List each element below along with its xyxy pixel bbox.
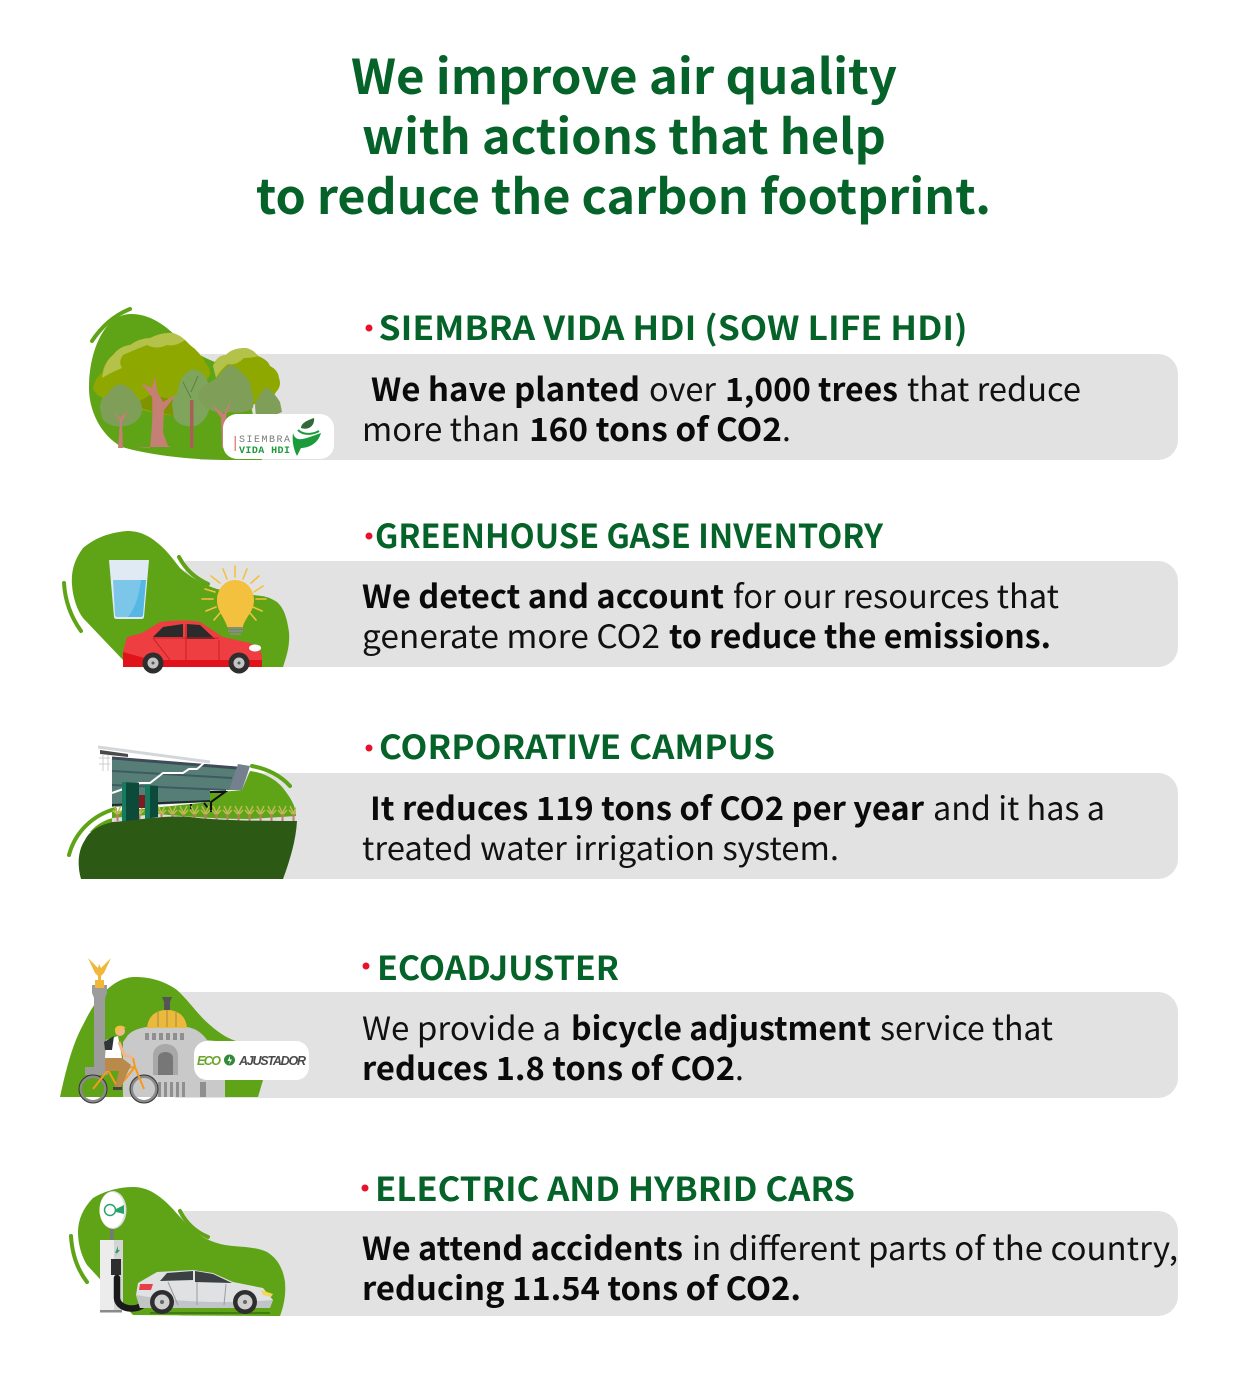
body text 3 [362, 784, 1105, 870]
body text 2: to reduce the emissions. [669, 612, 1051, 658]
grey text card 4 [175, 992, 1178, 1098]
body text 1: We have planted [371, 365, 640, 411]
body text 1 [362, 365, 1081, 451]
logo: Siembra Vida HDI: VIDA HDI [239, 446, 290, 457]
body text 4: We provide a [362, 1004, 561, 1050]
mid tree [172, 370, 211, 426]
dark green lawn [79, 817, 297, 879]
heading: Siembra Vida HDI: SIEMBRA VIDA HDI (SOW LIFE HDI) [378, 302, 968, 350]
body text 3: treated water irrigation system. [362, 824, 839, 870]
panel: Greenhouse gas inventory [64, 510, 1178, 674]
title [256, 38, 991, 228]
logo: Eco Ajustador [194, 1041, 309, 1080]
icon: campus building on green hill [69, 747, 297, 879]
panel: Siembra Vida HDI [89, 302, 1178, 460]
hedge [112, 814, 296, 822]
body text 4: . [735, 1044, 744, 1090]
grey text card 2 [185, 561, 1178, 667]
body text 5: We attend accidents [362, 1224, 683, 1270]
icon: green blob with trees [89, 309, 334, 460]
heading: Ecoadjuster: ECOADJUSTER [377, 942, 619, 990]
icon: green blob with monument, palace and cyclist [60, 958, 309, 1103]
body text 1: that reduce [907, 365, 1081, 411]
body text 4: service that [880, 1004, 1053, 1050]
body text 2 [362, 572, 1059, 658]
heading: Electric and hybrid cars: ELECTRIC AND HYBRID CARS [375, 1163, 855, 1211]
title: with actions that help [362, 98, 886, 168]
body text 5 [362, 1224, 1178, 1310]
icon: green blob with charger and car [71, 1187, 285, 1316]
body text 3: and it has a [933, 784, 1105, 830]
panel: Ecoadjuster [60, 942, 1178, 1103]
logo: Siembra Vida HDI [223, 414, 334, 459]
body text 1: 1,000 trees [725, 365, 898, 411]
body text 3: It reduces 119 tons of CO2 per year [370, 784, 924, 830]
body text 1: 160 tons of CO2 [529, 405, 782, 451]
body text 2: for our resources that [733, 572, 1059, 618]
grey text card 3 [240, 773, 1178, 879]
heading: Greenhouse gase inventory: GREENHOUSE GASE INVENTORY [375, 510, 884, 558]
icon: light bulb [202, 566, 266, 635]
panel: Electric and hybrid cars [71, 1163, 1178, 1316]
charging station [100, 1191, 147, 1312]
body text 2: generate more CO2 [362, 612, 660, 658]
grey text card 5 [180, 1211, 1178, 1316]
heading: Corporative campus: CORPORATIVE CAMPUS [379, 721, 775, 769]
ground shadow [150, 1312, 270, 1314]
monument column [85, 958, 111, 1075]
right small tree [255, 387, 282, 418]
body text 2: We detect and account [362, 572, 724, 618]
body text 4 [362, 1004, 1053, 1090]
grey text card 1 [200, 354, 1178, 460]
cyclist [79, 1026, 158, 1103]
body text 4: reduces 1.8 tons of CO2 [362, 1044, 735, 1090]
small left tree [100, 384, 142, 426]
right tree [198, 365, 254, 412]
entrance totem [122, 782, 158, 822]
logo: Siembra Vida HDI: SIEMBRA [239, 435, 290, 446]
palace [123, 997, 225, 1097]
title: to reduce the carbon footprint. [256, 158, 991, 228]
white electric car [136, 1270, 273, 1314]
big tree trunk [136, 376, 177, 448]
campus building [98, 747, 250, 812]
back right canopy [213, 348, 280, 410]
body text 5: reducing 11.54 tons of CO2. [362, 1264, 801, 1310]
body text 1: over [649, 365, 717, 411]
body text 1: . [782, 405, 791, 451]
body text 1: more than [362, 405, 520, 451]
title: We improve air quality [351, 38, 897, 108]
big canopy [93, 333, 210, 415]
body text 4: bicycle adjustment [571, 1004, 871, 1050]
logo: Eco Ajustador: ECO [197, 1054, 221, 1068]
body text 5: in different parts of the country, [692, 1224, 1178, 1270]
panel: Corporative campus [69, 721, 1178, 879]
icon: glass of water [109, 560, 149, 619]
icon: green blob with glass, bulb and car [64, 531, 289, 674]
icon: red car [123, 620, 262, 674]
logo: Eco Ajustador: AJUSTADOR [238, 1054, 306, 1068]
